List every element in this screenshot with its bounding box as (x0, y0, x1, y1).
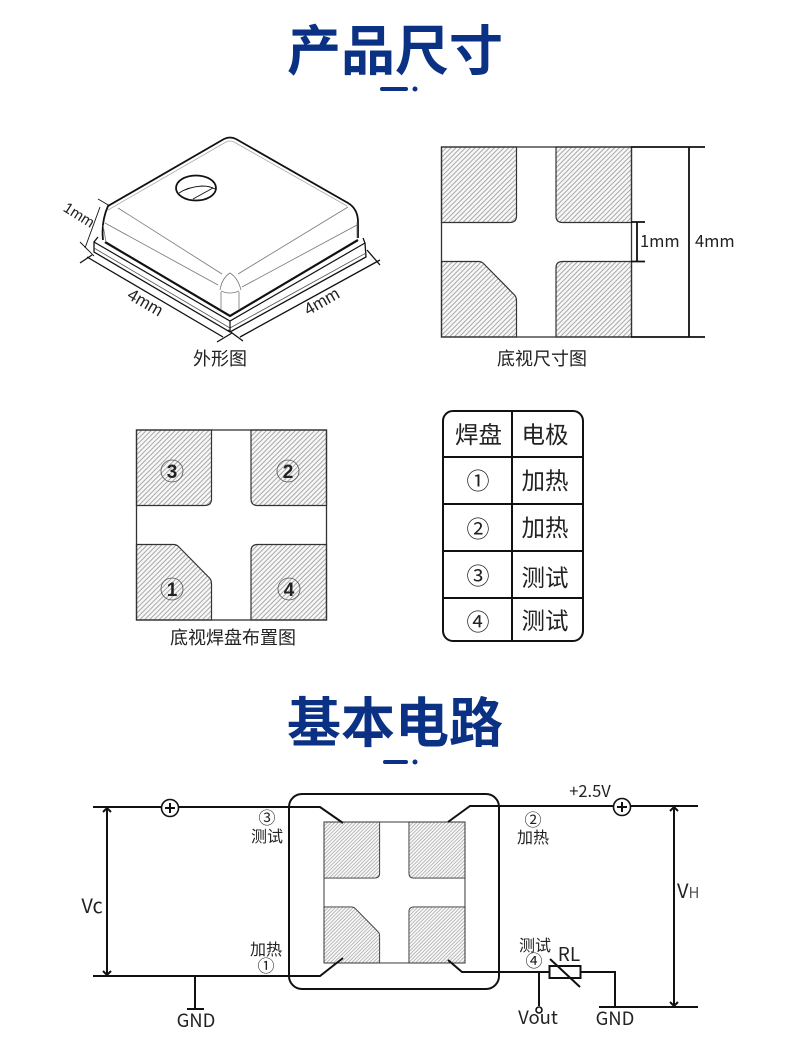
label pin 2: 加热 (517, 824, 549, 848)
plus source right (614, 798, 630, 816)
label pin 1 (250, 936, 282, 977)
body highlight lines (103, 141, 357, 310)
table: pad to electrode: 加热 (522, 509, 568, 543)
label 4mm: 4mm (695, 228, 735, 252)
label VH: VH (677, 875, 699, 904)
table: pad to electrode: ④ (466, 603, 490, 637)
load resistor RL (550, 940, 580, 987)
label pin 2 (517, 806, 549, 848)
table: pad to electrode: 测试 (522, 559, 568, 593)
label pin 1: 加热 (250, 936, 282, 960)
label pin 2: ② (524, 806, 542, 831)
dimension label 1mm: 1mm (60, 199, 97, 231)
table: pad to electrode: ① (466, 462, 490, 496)
panel: outline isometric view (60, 138, 380, 342)
label pin 4: 测试 (519, 932, 551, 956)
caption: bottom view: 底视尺寸图 (497, 345, 587, 371)
dimension label 4mm right: 4mm (301, 284, 343, 319)
left wiring (93, 807, 343, 1009)
label pin 4 (519, 932, 551, 972)
table: pad to electrode: 焊盘 (455, 416, 502, 450)
pad number 3 (161, 460, 183, 483)
table: pad to electrode: 加热 (522, 462, 568, 496)
table: pad to electrode: ② (466, 510, 490, 544)
label GND left: GND (177, 1007, 215, 1033)
pad number 3: 3 (167, 462, 177, 483)
label Vc: Vc (81, 890, 103, 919)
circuit diagram (81, 778, 699, 1033)
label +2.5V: +2.5V (569, 778, 611, 802)
pad number 2: 2 (283, 462, 293, 483)
dimension lines (80, 199, 380, 342)
panel: pad layout (136, 430, 326, 620)
dimension label 4mm left: 4mm (124, 285, 166, 320)
pad number 1 (161, 578, 183, 601)
table: pad to electrode: 测试 (522, 602, 568, 636)
pad number 2 (277, 460, 299, 483)
sensor package (289, 794, 499, 989)
base plate (94, 237, 366, 332)
vent hole (176, 176, 216, 200)
dimension lines (631, 147, 705, 337)
table: pad to electrode: ③ (466, 557, 490, 591)
label pin 1: ① (258, 952, 274, 977)
title: product dimensions: 产品尺寸 (287, 7, 503, 86)
plus source left (162, 800, 178, 816)
table: pad to electrode: 电极 (522, 416, 568, 450)
load resistor RL: RL (558, 940, 580, 967)
label GND right: GND (596, 1005, 634, 1031)
label pin 4: ④ (526, 947, 542, 972)
caption: outline view: 外形图 (193, 345, 247, 371)
pad number 4: 4 (284, 580, 295, 601)
pad number 4 (278, 578, 300, 601)
label pin 3 (251, 804, 283, 847)
panel: bottom view dimensions (442, 147, 735, 337)
package body (103, 138, 358, 240)
label pin 3: 测试 (251, 823, 283, 847)
label pin 3: ③ (258, 804, 276, 829)
table: pad to electrode (443, 411, 583, 641)
caption: pad layout: 底视焊盘布置图 (170, 624, 296, 650)
label 1mm: 1mm (640, 228, 680, 252)
right wiring (448, 806, 698, 1007)
title: basic circuit: 基本电路 (287, 679, 503, 758)
Vout terminal: Vout (518, 1004, 558, 1030)
pad number 1: 1 (167, 580, 178, 601)
